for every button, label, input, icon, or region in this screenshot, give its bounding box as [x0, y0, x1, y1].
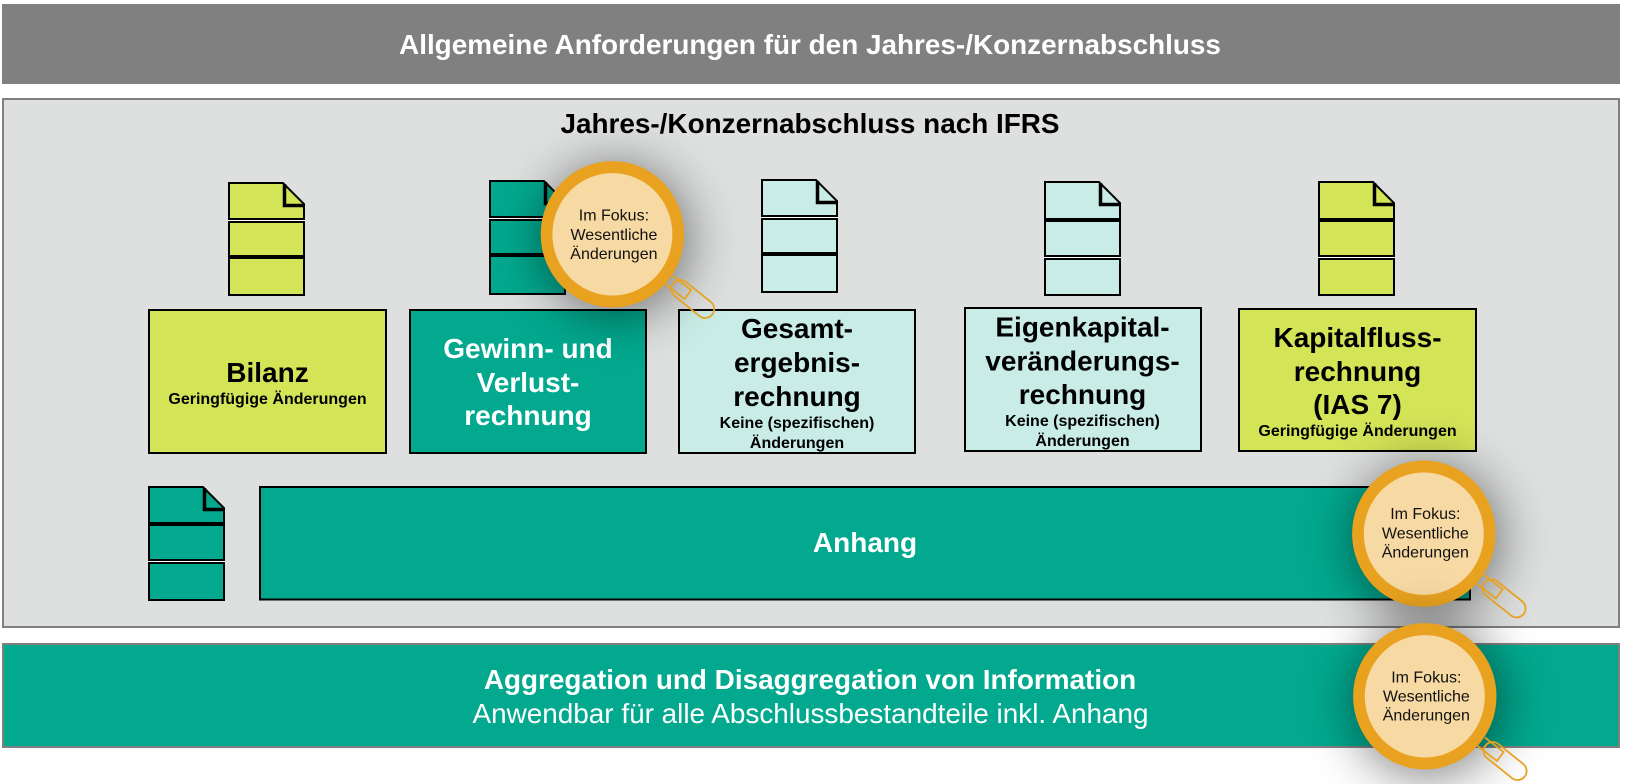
callout: magnifier on Anhang: Wesentliche [1382, 526, 1469, 543]
callout: magnifier on Gewinn- und Verlustrechnung: Änderungen [570, 245, 657, 263]
box: Bilanz [149, 310, 386, 453]
callout: magnifier on Aggregation: Im Fokus: [1391, 669, 1461, 686]
box: Eigenkapitalveränderungsrechnung: Keine (spezifischen) [1005, 413, 1160, 430]
box: Eigenkapitalveränderungsrechnung: rechnung [1019, 379, 1146, 410]
box: Eigenkapitalveränderungsrechnung: Änderungen [1035, 432, 1130, 450]
box: Gesamtergebnisrechnung: Gesamt- [741, 313, 853, 344]
box: Gewinn- und Verlustrechnung: rechnung [464, 400, 592, 431]
box: Gewinn- und Verlustrechnung: Gewinn- und [443, 333, 613, 364]
box: Bilanz: Bilanz [226, 357, 309, 388]
icon: Eigenkapitalveränderungsrechnung document [1044, 182, 1121, 295]
icon: Gesamtergebnisrechnung document [761, 180, 838, 292]
box: Gesamtergebnisrechnung: ergebnis- [734, 347, 860, 378]
box: Eigenkapitalveränderungsrechnung [965, 308, 1201, 451]
box: Gesamtergebnisrechnung: Keine (spezifischen) [720, 415, 874, 432]
box: Kapitalflussrechnung: rechnung [1294, 356, 1421, 387]
icon: Kapitalflussrechnung document [1318, 182, 1395, 295]
box: Anhang: Anhang [813, 527, 917, 558]
callout: magnifier on Anhang: Im Fokus: [1390, 506, 1460, 523]
box: Kapitalflussrechnung [1239, 309, 1476, 451]
callout: magnifier on Aggregation [1353, 623, 1530, 784]
box: Anhang [260, 487, 1470, 600]
box: Kapitalflussrechnung: Kapitalfluss- [1273, 322, 1442, 353]
callout: magnifier on Anhang [1352, 460, 1529, 621]
box: Bilanz: Geringfügige Änderungen [168, 390, 367, 408]
box: Eigenkapitalveränderungsrechnung: veränderungs- [985, 346, 1180, 376]
box: Kapitalflussrechnung: (IAS 7) [1313, 389, 1402, 420]
icon: Gewinn- und Verlustrechnung document [489, 181, 566, 294]
icon: Bilanz document [228, 183, 305, 295]
header bar: Allgemeine Anforderungen [2, 4, 1620, 84]
callout: magnifier on Gewinn- und Verlustrechnung: Im Fokus: [579, 207, 649, 224]
bar: Aggregation und Disaggregation von Information: Aggregation und Disaggregation von Information [484, 664, 1136, 695]
callout: magnifier on Aggregation: Wesentliche [1383, 689, 1470, 706]
panel heading: Jahres-/Konzernabschluss nach IFRS [560, 108, 1060, 139]
panel: Jahres-/Konzernabschluss nach IFRS [3, 99, 1619, 627]
callout: magnifier on Gewinn- und Verlustrechnung: Wesentliche [570, 227, 657, 244]
box: Kapitalflussrechnung: Geringfügige Änderungen [1258, 422, 1457, 440]
callout: magnifier on Gewinn- und Verlustrechnung [541, 161, 718, 322]
box: Gewinn- und Verlustrechnung [410, 310, 646, 453]
bar: Aggregation und Disaggregation von Information [3, 644, 1619, 747]
box: Gewinn- und Verlustrechnung: Verlust- [477, 367, 579, 398]
box: Gesamtergebnisrechnung: Änderungen [750, 434, 844, 452]
box: Gesamtergebnisrechnung [679, 310, 915, 453]
box: Gesamtergebnisrechnung: rechnung [733, 381, 861, 412]
bar: Aggregation und Disaggregation von Information: Anwendbar für alle Abschlussbestandteile inkl. Anhang [472, 698, 1149, 729]
box: Eigenkapitalveränderungsrechnung: Eigenkapital- [995, 312, 1170, 342]
callout: magnifier on Anhang: Änderungen [1382, 544, 1469, 562]
icon: Anhang document [148, 487, 225, 600]
callout: magnifier on Aggregation: Änderungen [1383, 707, 1470, 725]
header bar: Allgemeine Anforderungen: Allgemeine Anforderungen für den Jahres-/Konzernabschluss [399, 29, 1221, 60]
